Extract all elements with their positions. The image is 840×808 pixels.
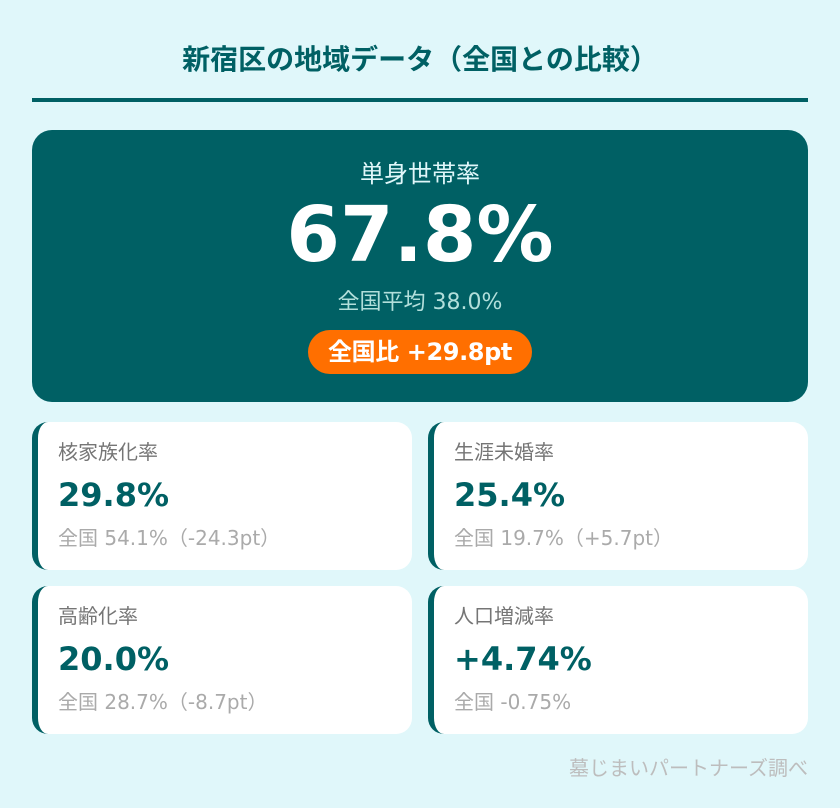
card value: +4.74% [454, 640, 592, 678]
card label: 核家族化率 [58, 440, 158, 464]
card comparison: 全国 19.7%（+5.7pt） [454, 526, 673, 550]
title: 新宿区の地域データ（全国との比較） [182, 43, 658, 76]
card: nuclear family rate [32, 422, 412, 570]
card comparison: 全国 -0.75% [454, 690, 571, 714]
card label: 高齢化率 [58, 604, 138, 628]
hero label: 単身世帯率 [360, 160, 480, 188]
card: lifetime unmarried rate [428, 422, 808, 570]
card label: 生涯未婚率 [454, 440, 554, 464]
card: aging rate [32, 586, 412, 734]
card comparison: 全国 28.7%（-8.7pt） [58, 690, 267, 714]
card comparison: 全国 54.1%（-24.3pt） [58, 526, 280, 550]
card value: 29.8% [58, 476, 169, 514]
card value: 20.0% [58, 640, 169, 678]
comparison badge: 全国比 +29.8pt [328, 338, 512, 366]
national average: 全国平均 38.0% [338, 290, 502, 315]
title underline [32, 98, 808, 102]
comparison badge [308, 330, 532, 374]
card label: 人口増減率 [454, 604, 554, 628]
hero value: 67.8% [286, 191, 554, 280]
source note: 墓じまいパートナーズ調べ [569, 756, 808, 780]
card: population change rate [428, 586, 808, 734]
panel: single-person household rate [32, 130, 808, 402]
card value: 25.4% [454, 476, 565, 514]
